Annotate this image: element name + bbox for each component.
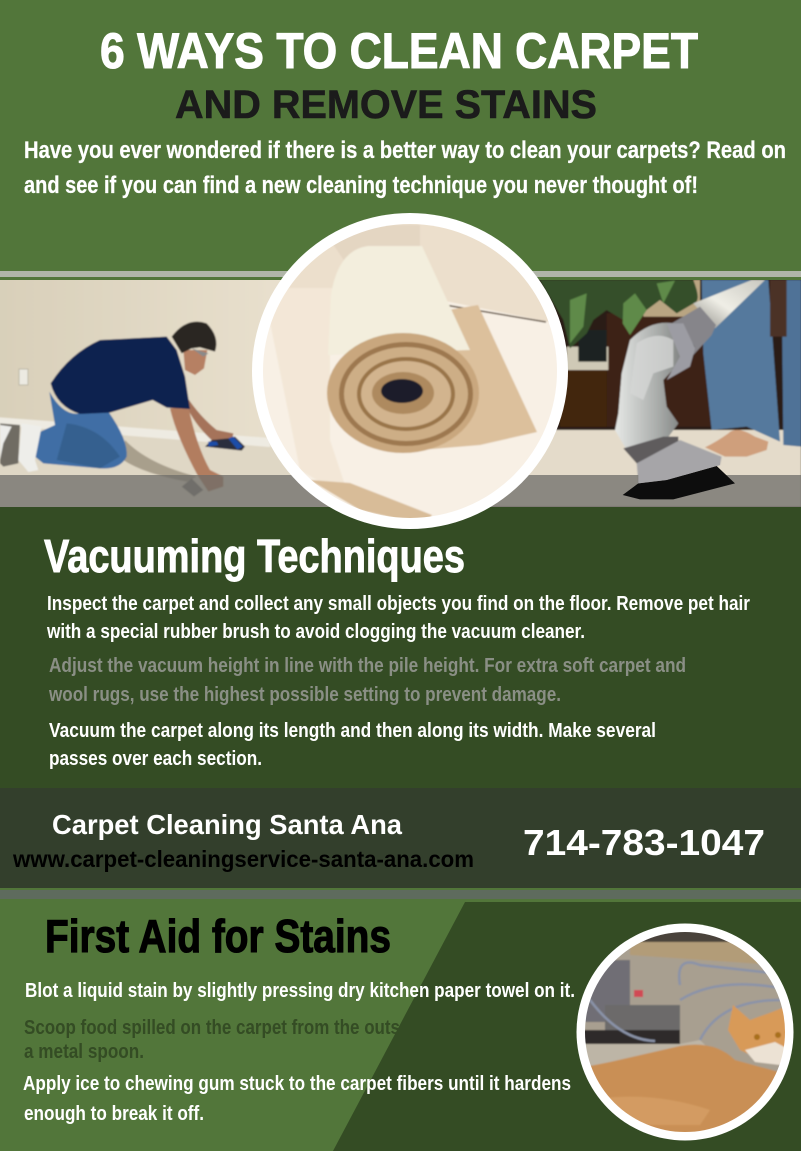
text: vacuum along length: passes over each section. [49,748,262,770]
text: adjust the vacuum height [48,655,686,706]
nozzle [623,437,678,465]
center circular photo: rolled carpet [250,210,570,530]
cat head [728,1005,785,1054]
furniture [607,313,713,427]
shadow [123,440,197,482]
foot [705,430,768,457]
head [183,350,207,375]
vacuum brush [623,457,735,499]
text: inspect the carpet: with a special rubber brush to avoid clogging the vacuum cleaner. [46,621,585,643]
panel: header background [0,0,801,271]
text: scoop food [24,1017,400,1063]
text: apply ice: enough to break it off. [24,1103,204,1125]
photo: vacuum cleaner [490,280,801,507]
heading: first aid for stains: First Aid for Stains [45,910,391,962]
flat carpet [420,305,537,450]
carpet [586,1040,704,1066]
vacuum [580,960,630,1022]
floor [490,428,801,507]
roll spiral [327,333,479,453]
website url: www.carpet-cleaningservice-santa-ana.com [12,846,474,872]
intro text [24,137,786,199]
tools [205,437,245,451]
title: AND REMOVE STAINS [175,83,597,127]
text: adjust the vacuum height: Adjust the vacuum height in line with the pile height. For extra soft carpet and [49,655,686,677]
jeans [35,392,127,469]
gray carpet band [0,475,801,507]
company name: Carpet Cleaning Santa Ana [52,809,402,840]
jeans [702,280,780,442]
photo: man fitting carpet [0,280,330,507]
heading: vacuuming techniques: Vacuuming Techniques [44,530,465,582]
roll hole [381,379,423,403]
phone number: 714-783-1047 [523,822,765,863]
title: 6 WAYS TO CLEAN CARPET [100,23,698,79]
text: blot a liquid stain: Blot a liquid stain by slightly pressing dry kitchen paper towel on it. [25,980,575,1002]
text: scoop food: Scoop food spilled on the carpet from the outs [24,1017,400,1039]
wall [289,224,548,322]
text: apply ice [23,1073,571,1125]
cat body [591,1044,777,1132]
text: adjust the vacuum height: wool rugs, use the highest possible setting to prevent damage. [48,684,561,706]
bottom carpet strip [311,480,432,518]
roll backing [328,246,470,355]
shoes [0,423,20,467]
tube [693,280,765,328]
text: scoop food: a metal spoon. [24,1041,144,1063]
clear hose [614,322,680,448]
text: inspect the carpet [46,593,750,643]
text: vacuum along length [49,720,656,770]
panel: vacuuming background [0,507,801,788]
text: vacuum along length: Vacuum the carpet along its length and then along its width. Make several [49,720,656,742]
panel: first aid background [0,902,801,1151]
panel: contact band [0,788,801,888]
floor cream [271,288,344,482]
arms [187,400,234,442]
circular photo: cat on carpet [576,924,794,1140]
title [100,23,698,127]
photo strip separator [0,271,801,280]
plant [540,280,698,348]
lower separator [0,888,801,902]
shirt [51,337,190,414]
hoses [590,962,790,1041]
text: apply ice: Apply ice to chewing gum stuck to the carpet fibers until it hardens [23,1073,571,1095]
